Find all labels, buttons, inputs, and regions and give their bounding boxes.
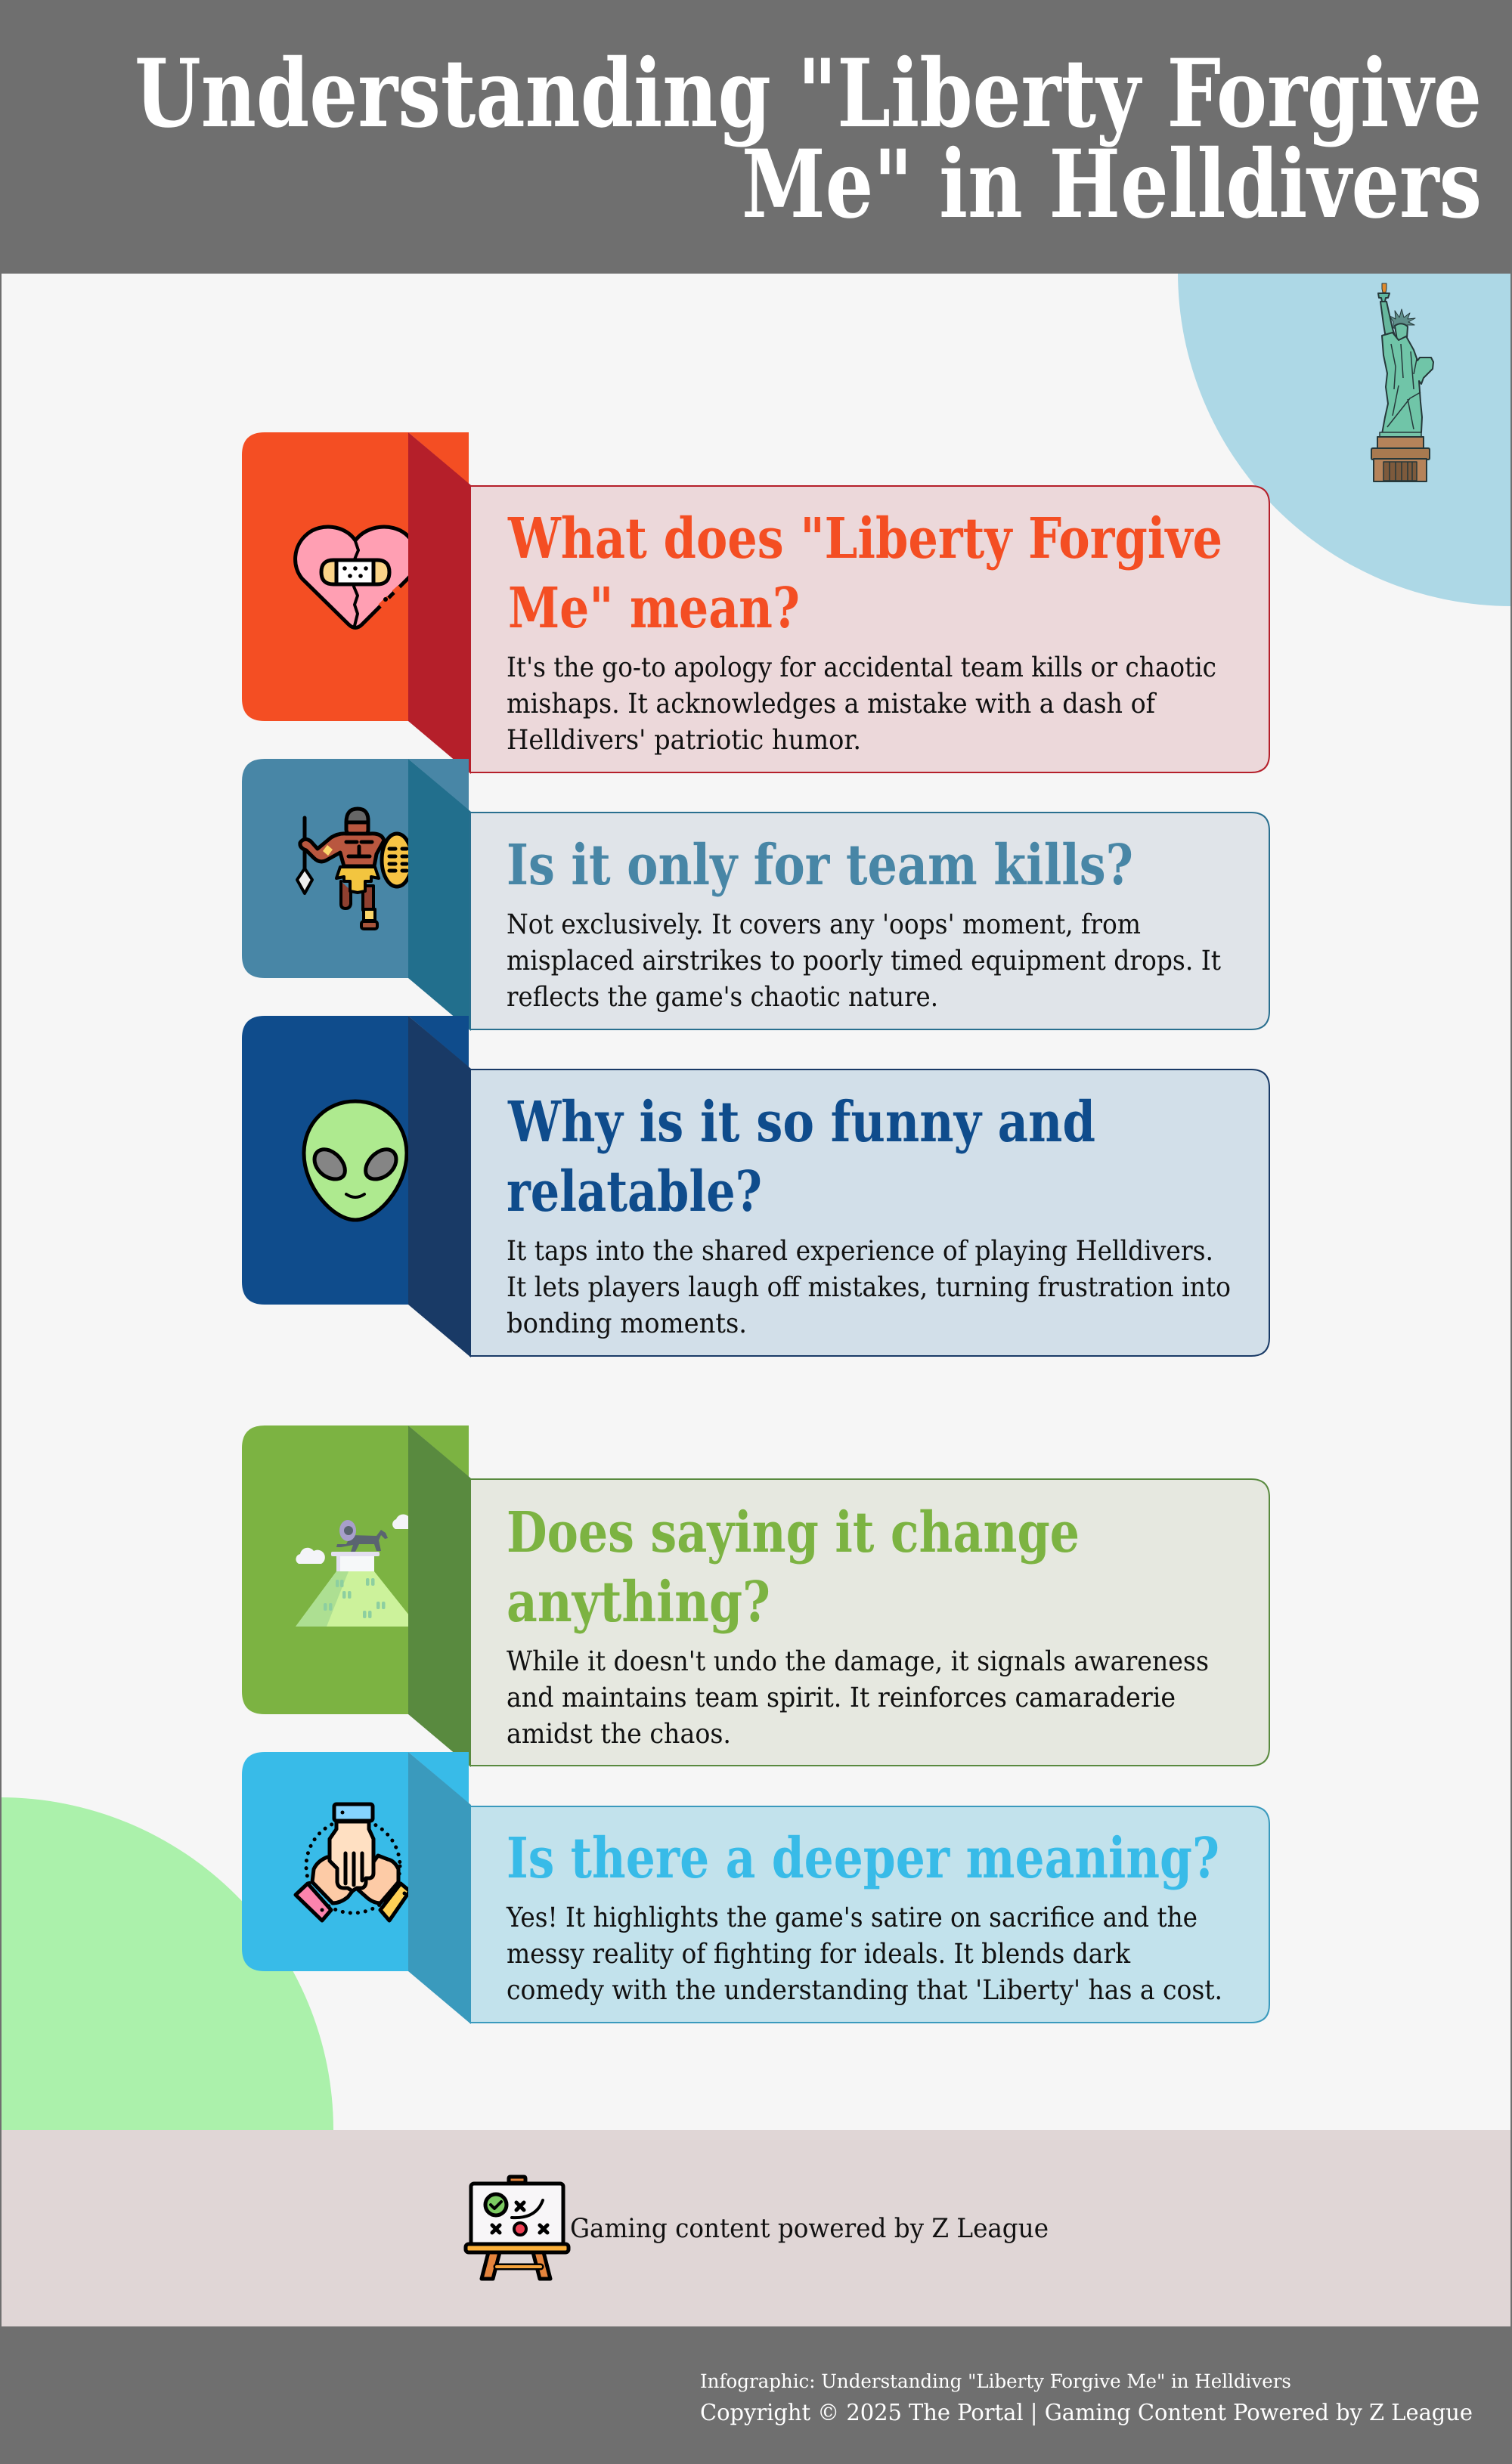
icon: lion monument hill xyxy=(296,1514,418,1627)
footer text xyxy=(700,2370,1473,2426)
icon: tactics board easel xyxy=(466,2177,569,2279)
header band xyxy=(0,0,1512,274)
icon tile xyxy=(242,1016,469,1305)
footer text: Infographic: Understanding "Liberty Forgive Me" in Helldivers xyxy=(700,2370,1291,2392)
credit band xyxy=(0,2130,1512,2326)
folded side panel xyxy=(408,432,471,774)
folded side panel xyxy=(408,1016,471,1357)
body text: It taps into the shared experience of playing Helldivers. xyxy=(507,1236,1213,1267)
icon: warrior xyxy=(297,809,412,929)
body text: amidst the chaos. xyxy=(507,1719,731,1750)
credit text: Gaming content powered by Z League xyxy=(570,2214,1049,2244)
icon: alien head xyxy=(304,1101,407,1220)
heading: Me" mean? xyxy=(508,576,800,641)
title xyxy=(135,39,1482,240)
body text: reflects the game's chaotic nature. xyxy=(507,982,938,1013)
icon: bandaged heart xyxy=(296,527,417,627)
footer band xyxy=(0,2326,1512,2464)
card 5: deeper meaning xyxy=(242,1752,1269,2024)
heading: anything? xyxy=(507,1570,770,1635)
footer text: Copyright © 2025 The Portal | Gaming Content Powered by Z League xyxy=(700,2400,1473,2426)
text box xyxy=(470,1069,1269,1356)
body text: bonding moments. xyxy=(507,1308,747,1339)
icon tile xyxy=(242,1752,469,1971)
icon tile xyxy=(242,1425,469,1714)
heading: Does saying it change xyxy=(507,1500,1080,1565)
icon tile xyxy=(242,759,469,978)
body text xyxy=(506,1902,1222,2006)
heading xyxy=(507,1500,1080,1635)
icon: stacked hands xyxy=(296,1804,410,1921)
text box xyxy=(470,1806,1269,2023)
icon tile xyxy=(242,432,469,721)
heading: What does "Liberty Forgive xyxy=(507,506,1222,571)
body text: and maintains team spirit. It reinforces camaraderie xyxy=(507,1682,1176,1713)
heading: Is there a deeper meaning? xyxy=(507,1826,1219,1891)
body text xyxy=(507,909,1221,1013)
body text: misplaced airstrikes to poorly timed equipment drops. It xyxy=(507,946,1221,977)
heading: Why is it so funny and xyxy=(507,1090,1095,1155)
body text: Helldivers' patriotic humor. xyxy=(507,725,861,756)
body text: comedy with the understanding that 'Liberty' has a cost. xyxy=(507,1975,1222,2006)
body text: messy reality of fighting for ideals. It blends dark xyxy=(507,1939,1130,1970)
body text xyxy=(507,652,1216,756)
card 3: funny and relatable xyxy=(242,1016,1269,1357)
icon: statue of liberty xyxy=(1371,283,1433,481)
card 2: only for team kills xyxy=(242,759,1269,1031)
heading xyxy=(507,506,1222,641)
body text xyxy=(507,1236,1231,1339)
text box xyxy=(470,1479,1269,1766)
body text: mishaps. It acknowledges a mistake with a dash of xyxy=(507,689,1157,720)
body text: Not exclusively. It covers any 'oops' moment, from xyxy=(507,909,1141,940)
folded side panel xyxy=(408,759,471,1031)
text box xyxy=(470,813,1269,1029)
heading: Is it only for team kills? xyxy=(507,833,1133,898)
heading: relatable? xyxy=(507,1159,762,1224)
body text xyxy=(507,1646,1209,1750)
text box xyxy=(470,486,1269,772)
body text: While it doesn't undo the damage, it signals awareness xyxy=(507,1646,1209,1677)
body text: Yes! It highlights the game's satire on sacrifice and the xyxy=(506,1902,1198,1933)
body text: It's the go-to apology for accidental team kills or chaotic xyxy=(507,652,1216,683)
heading xyxy=(507,1090,1095,1224)
folded side panel xyxy=(408,1752,471,2024)
decorative blue circle xyxy=(1178,0,1512,606)
card 4: does saying it change anything xyxy=(242,1425,1269,1767)
card 1: what does it mean xyxy=(242,432,1269,774)
folded side panel xyxy=(408,1425,471,1767)
body text: It lets players laugh off mistakes, turning frustration into xyxy=(507,1272,1231,1303)
decorative green circle xyxy=(0,1797,333,2130)
